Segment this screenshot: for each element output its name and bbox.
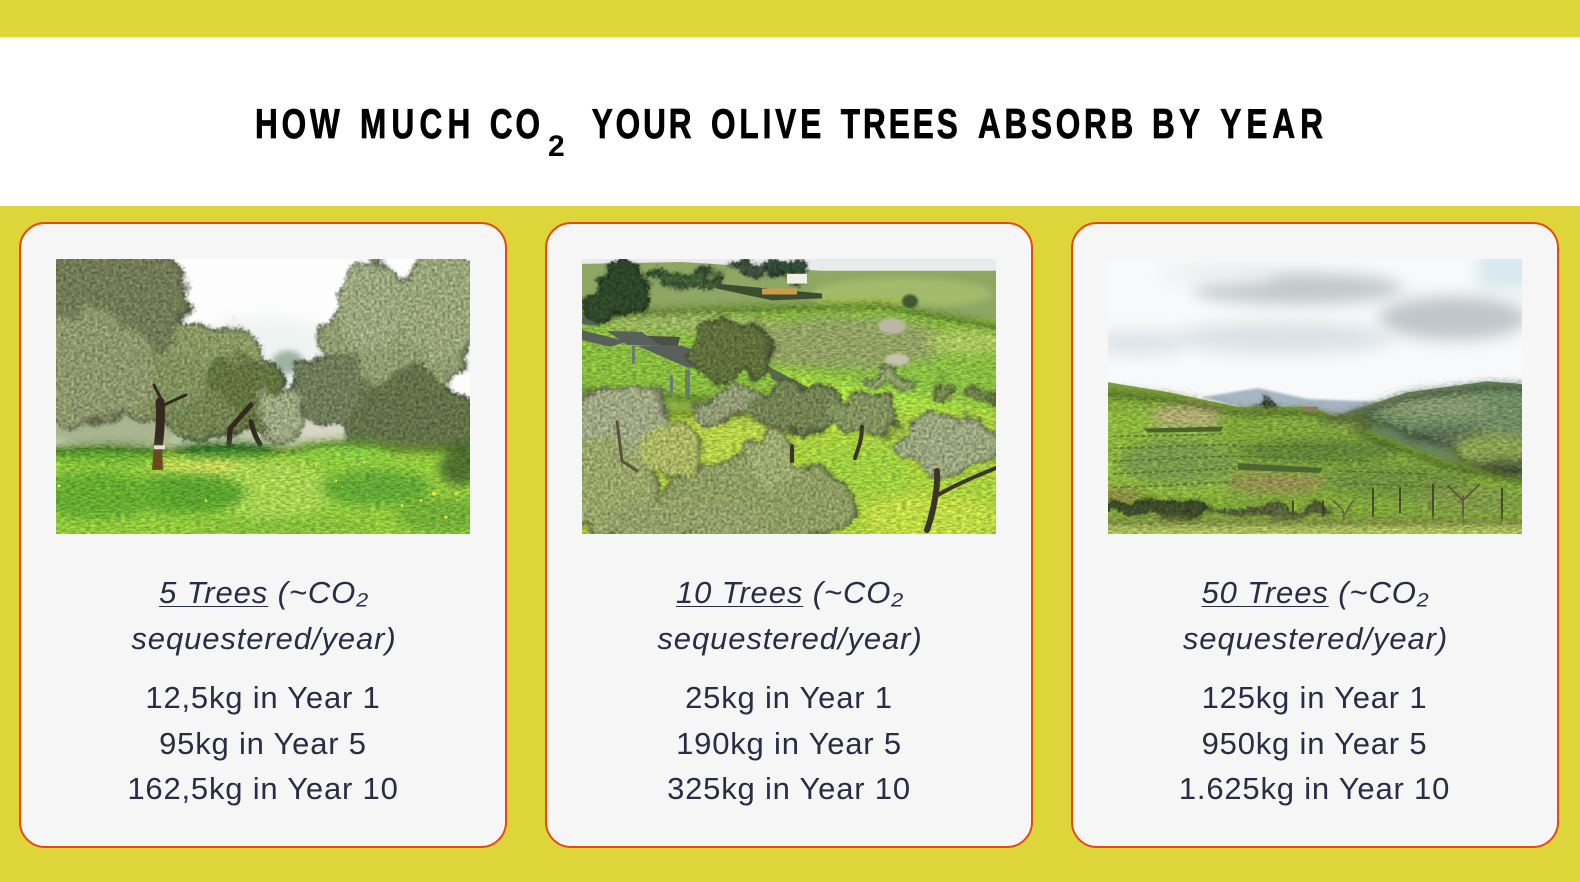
stats: 10 trees: 325kg in Year 10 <box>667 771 911 806</box>
title: YOUR <box>592 100 692 147</box>
heading: 5 trees <box>131 575 397 656</box>
stats: 50 trees <box>1179 680 1450 806</box>
title: CO <box>490 100 540 147</box>
title: MUCH <box>360 100 470 147</box>
heading: 50 trees: 50 Trees (~CO₂ <box>1202 575 1430 610</box>
heading: 5 trees: 5 Trees (~CO₂ <box>159 575 369 610</box>
stats: 50 trees: 1.625kg in Year 10 <box>1179 771 1450 806</box>
title: HOW <box>255 100 340 147</box>
title: ABSORB <box>978 100 1133 147</box>
heading: 10 trees: 10 Trees (~CO₂ <box>676 575 904 610</box>
stats: 10 trees <box>667 680 911 806</box>
stats: 10 trees: 25kg in Year 1 <box>685 680 893 715</box>
heading: 50 trees: sequestered/year) <box>1183 621 1448 656</box>
top white title band <box>0 37 1580 206</box>
stats: 10 trees: 190kg in Year 5 <box>676 726 902 760</box>
photo: olive trees in green meadow <box>56 259 470 534</box>
title <box>255 100 1323 163</box>
title: OLIVE <box>711 100 821 147</box>
photo: hillside olive grove with solar panels <box>582 259 996 534</box>
panel: 5 trees <box>19 222 507 848</box>
stats: 5 trees: 12,5kg in Year 1 <box>145 680 381 715</box>
heading: 50 trees <box>1183 575 1448 656</box>
heading: 10 trees: sequestered/year) <box>657 621 923 656</box>
title: BY <box>1152 100 1200 147</box>
stats: 50 trees: 125kg in Year 1 <box>1202 680 1427 715</box>
stats: 5 trees: 162,5kg in Year 10 <box>127 771 399 806</box>
stats: 5 trees <box>127 680 399 806</box>
panel: 50 trees <box>1070 222 1558 848</box>
panel: 10 trees <box>545 222 1033 848</box>
title: 2 <box>548 130 565 163</box>
photo: valley landscape with terraced olive groves <box>1108 259 1522 534</box>
stats: 5 trees: 95kg in Year 5 <box>159 726 367 760</box>
heading: 10 trees <box>657 575 923 656</box>
stats: 50 trees: 950kg in Year 5 <box>1202 726 1427 760</box>
title: TREES <box>841 100 958 147</box>
heading: 5 trees: sequestered/year) <box>131 621 397 656</box>
title: YEAR <box>1220 100 1323 147</box>
